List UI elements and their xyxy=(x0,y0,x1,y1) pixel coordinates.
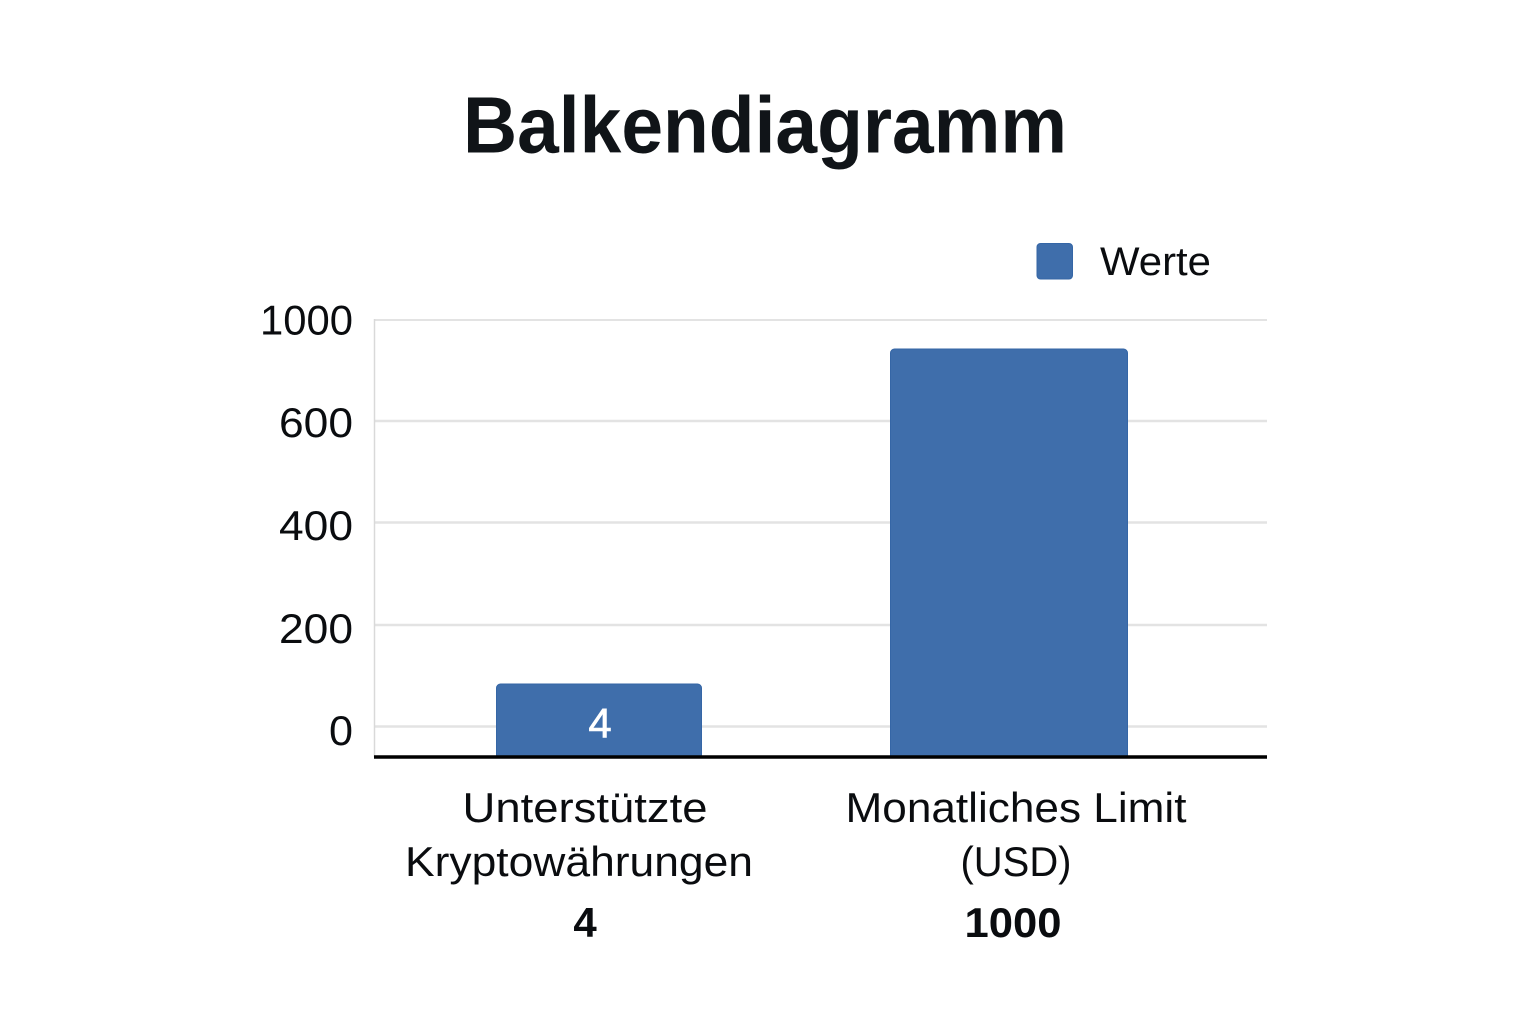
category label: Unterstützte Kryptowährungen xyxy=(405,784,753,946)
title: Balkendiagramm xyxy=(463,80,1067,170)
y axis labels xyxy=(260,296,353,754)
x axis xyxy=(374,755,1267,759)
legend swatch xyxy=(1037,244,1072,279)
y axis labels: 0 xyxy=(329,707,353,754)
y axis labels: 1000 xyxy=(260,296,353,344)
category label: Unterstützte Kryptowährungen: Kryptowährungen xyxy=(405,838,753,885)
bar: Monatliches Limit xyxy=(890,349,1128,757)
category label: Monatliches Limit: Monatliches Limit xyxy=(846,784,1187,831)
category label: Monatliches Limit: 1000 xyxy=(964,899,1062,946)
y axis labels: 200 xyxy=(279,605,353,652)
chart xyxy=(260,296,1267,757)
bar: Unterstützte Kryptowährungen xyxy=(496,684,702,757)
legend xyxy=(1037,240,1211,284)
category label: Monatliches Limit xyxy=(846,784,1187,946)
bar value label: 4 xyxy=(588,700,612,746)
category label: Unterstützte Kryptowährungen: 4 xyxy=(573,899,597,946)
category label: Unterstützte Kryptowährungen: Unterstützte xyxy=(462,784,708,831)
legend label: Werte xyxy=(1100,240,1211,284)
y axis labels: 600 xyxy=(279,399,353,446)
category label: Monatliches Limit: (USD) xyxy=(960,838,1072,885)
y axis labels: 400 xyxy=(279,502,353,549)
